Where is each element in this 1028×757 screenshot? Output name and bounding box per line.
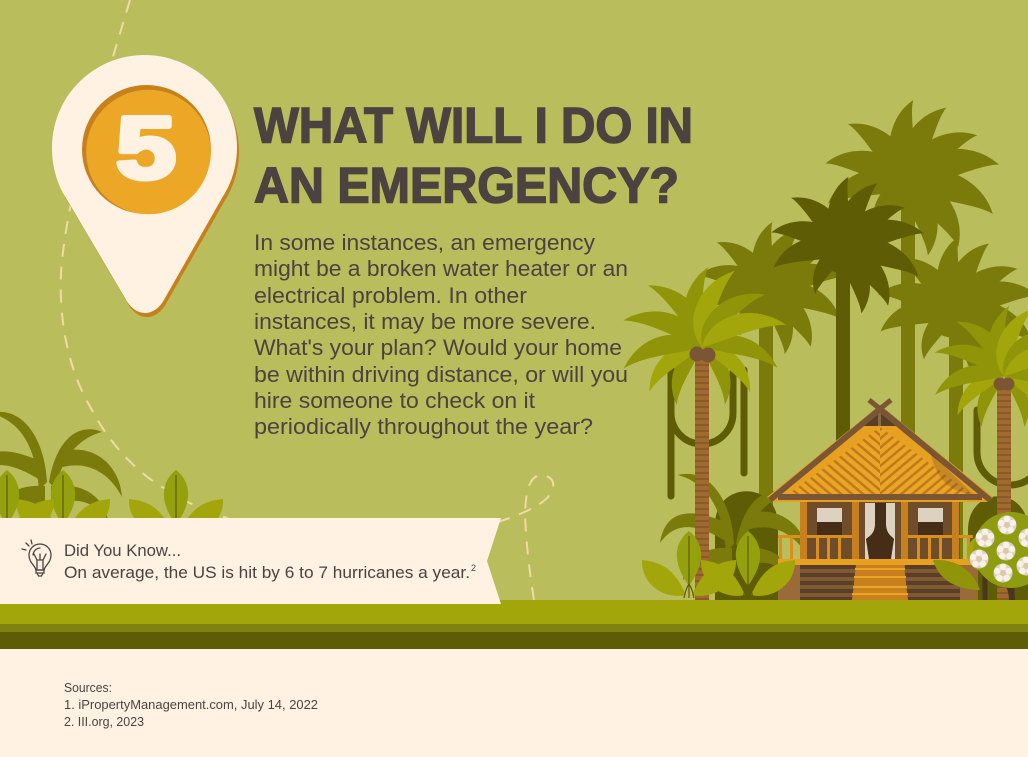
body text: might be a broken water heater or an bbox=[254, 256, 628, 281]
did you know banner bbox=[0, 518, 501, 604]
body text: periodically throughout the year? bbox=[254, 414, 593, 439]
railings bbox=[778, 535, 973, 560]
sources: 1. iPropertyManagement.com, July 14, 2022 bbox=[64, 698, 318, 712]
map pin bbox=[52, 55, 239, 317]
walls bbox=[800, 498, 960, 562]
porch floor bbox=[778, 559, 976, 565]
plant: right bbox=[933, 560, 980, 590]
pin body bbox=[52, 55, 237, 313]
banana plants by house bbox=[642, 531, 980, 598]
palm: right rear bbox=[876, 234, 1028, 600]
banana plants at left bbox=[0, 470, 223, 537]
number 5: 5 bbox=[116, 98, 176, 197]
back palm trees bbox=[671, 98, 1028, 605]
plant: centre bbox=[701, 531, 795, 598]
front right palm bbox=[931, 301, 1028, 600]
posts bbox=[800, 498, 959, 562]
roof cross bbox=[869, 400, 891, 412]
steps bbox=[852, 565, 908, 600]
title: WHAT WILL I DO IN bbox=[254, 98, 693, 154]
sources: Sources: bbox=[64, 681, 112, 695]
palm: left rear bbox=[696, 220, 847, 600]
dashed route line bbox=[61, 0, 553, 600]
number circle bbox=[82, 85, 211, 214]
body text: electrical problem. In other bbox=[254, 283, 528, 308]
did you know text: 2 bbox=[471, 563, 476, 573]
body text: In some instances, an emergency bbox=[254, 230, 596, 255]
shrub: fronds behind left of house bbox=[660, 474, 809, 582]
sources: 2. III.org, 2023 bbox=[64, 715, 144, 729]
front left palm bbox=[619, 262, 786, 600]
title bbox=[254, 98, 693, 214]
foundation bbox=[778, 564, 978, 600]
ground bbox=[0, 600, 1028, 649]
door with curtains bbox=[865, 503, 895, 559]
roof bbox=[767, 400, 993, 502]
flowering bush bbox=[967, 512, 1028, 600]
palm: dark middle bbox=[769, 175, 926, 600]
icon: light bulb bbox=[22, 540, 51, 576]
shrub: fronds at left edge bbox=[0, 412, 122, 520]
sources bbox=[64, 681, 318, 729]
body text: What's your plan? Would your home bbox=[254, 335, 622, 360]
plant: left of trunk bbox=[642, 531, 736, 598]
did you know text: Did You Know... bbox=[64, 542, 181, 560]
did you know text: On average, the US is hit by 6 to 7 hurricanes a year. bbox=[64, 564, 470, 582]
windows bbox=[817, 508, 943, 536]
footer band bbox=[0, 649, 1028, 757]
body text: hire someone to check on it bbox=[254, 388, 536, 413]
dark bushes behind house bbox=[715, 491, 1028, 600]
body text bbox=[254, 230, 628, 439]
title: AN EMERGENCY? bbox=[254, 158, 679, 214]
pin shadow bbox=[54, 59, 239, 317]
foundation stripes left bbox=[800, 564, 856, 600]
palm: tall rear bbox=[823, 98, 1001, 605]
house bbox=[767, 400, 993, 600]
did you know text bbox=[64, 542, 476, 582]
body text: be within driving distance, or will you bbox=[254, 362, 628, 387]
hanging vines bbox=[671, 360, 1028, 496]
foundation stripes right bbox=[905, 564, 960, 600]
body text: instances, it may be more severe. bbox=[254, 309, 596, 334]
